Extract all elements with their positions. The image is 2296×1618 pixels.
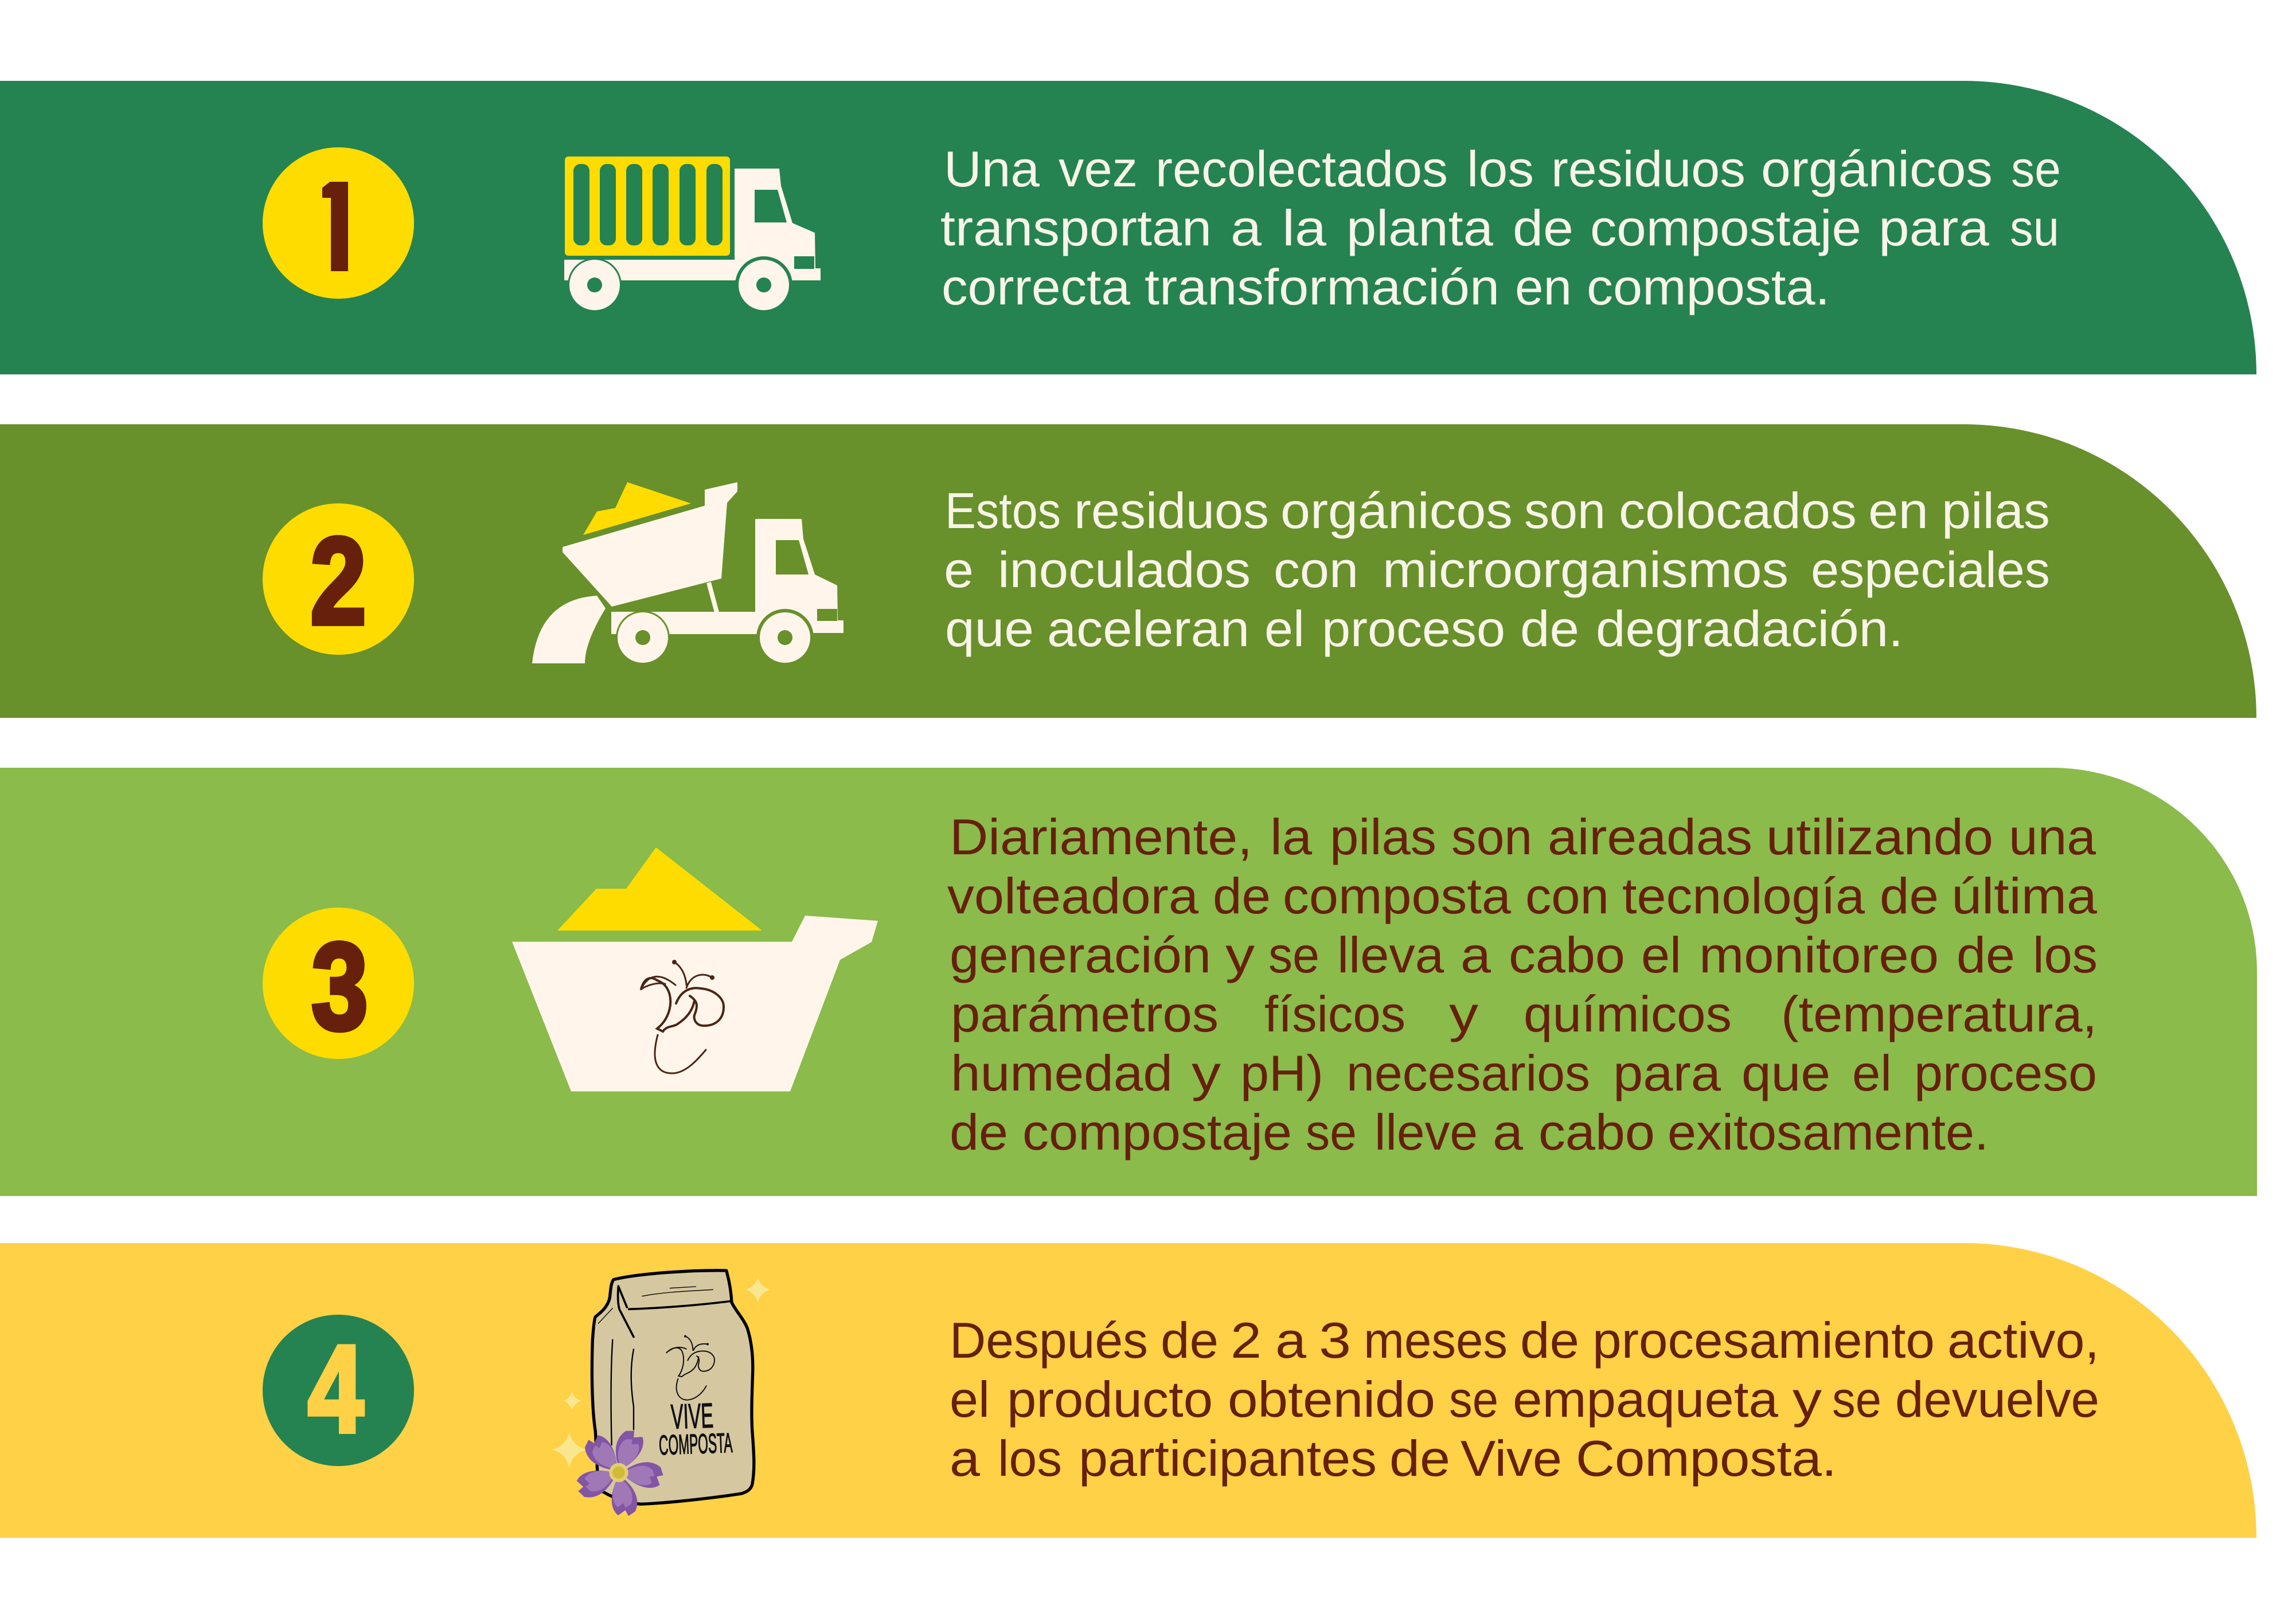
text block 2: colocados — [1619, 482, 1857, 539]
text block 1: se — [2011, 140, 2061, 197]
icon: sprout logo — [641, 961, 724, 1073]
text block 3: y — [1449, 986, 1478, 1042]
number badge 1 — [263, 147, 414, 299]
text block 2: proceso — [1322, 600, 1505, 657]
flower — [572, 1427, 663, 1520]
text block 2: especiales — [1811, 541, 2050, 598]
text block 2: inoculados — [998, 541, 1251, 598]
text block 3: la — [1270, 808, 1312, 865]
text block 3: proceso — [1914, 1045, 2097, 1101]
text block 4: y — [1793, 1371, 1822, 1428]
text block 3: aireadas — [1548, 808, 1752, 865]
text block 3: para — [1613, 1045, 1721, 1101]
text block 4: empaqueta — [1513, 1371, 1778, 1428]
text block 4: Después — [950, 1312, 1148, 1369]
text block 1: compostaje — [1590, 200, 1861, 256]
text block 1: correcta — [942, 259, 1130, 315]
text block 1: de — [1513, 200, 1573, 256]
text block 3: cabo — [1539, 1104, 1655, 1160]
icon: container truck — [564, 157, 821, 314]
text block 2: pilas — [1942, 482, 2050, 539]
text block 2: orgánicos — [1280, 482, 1513, 539]
text block 4: participantes — [1079, 1430, 1377, 1487]
text block 2: degradación. — [1596, 600, 1903, 657]
text block 3: de — [1957, 927, 2015, 983]
text block 1: Una — [944, 140, 1040, 197]
text block 3: pilas — [1330, 808, 1436, 865]
text block 2: residuos — [1074, 482, 1269, 539]
text block 3: con — [1525, 867, 1609, 924]
text block 1: residuos — [1551, 140, 1746, 197]
text block 4: activo, — [1947, 1312, 2099, 1369]
text block 2: que — [945, 600, 1034, 657]
text block 3: tecnología — [1622, 867, 1865, 924]
band 1 — [0, 81, 2256, 374]
number badge 3 — [263, 908, 414, 1059]
text block 3: el — [1641, 927, 1681, 983]
text block 2: microorganismos — [1383, 541, 1789, 598]
text block 3: exitosamente. — [1668, 1104, 1989, 1160]
number badge 2: 2 — [310, 511, 366, 650]
text block 4: los — [998, 1430, 1062, 1487]
text block 4: se — [1449, 1371, 1498, 1428]
text block 1 — [940, 140, 2061, 315]
text block 4: meses — [1364, 1312, 1508, 1369]
panel: step 3 — [0, 768, 2257, 1196]
text block 1: transportan — [940, 200, 1212, 256]
text block 1: vez — [1059, 140, 1138, 197]
text block 3: de — [1880, 867, 1939, 924]
sparkles — [552, 1277, 770, 1467]
text block 4: el — [950, 1371, 990, 1428]
text block 4: a — [1275, 1312, 1306, 1369]
text block 3: humedad — [951, 1045, 1173, 1101]
text block 4: 3 — [1319, 1312, 1351, 1369]
text block 3: y — [1225, 927, 1255, 983]
text block 4: Composta. — [1576, 1430, 1837, 1487]
text block 1: recolectados — [1155, 140, 1448, 197]
bag logo — [666, 1336, 714, 1400]
text block 4: 2 — [1231, 1312, 1262, 1369]
text block 2: e — [944, 541, 974, 598]
text block 2: Estos — [945, 482, 1061, 539]
text block 3: de — [950, 1104, 1008, 1160]
text block 3: lleve — [1375, 1104, 1478, 1160]
text block 3: necesarios — [1346, 1045, 1590, 1101]
text block 3: una — [2009, 808, 2096, 865]
panel: step 4 — [0, 1243, 2256, 1538]
text block 4: producto — [1007, 1371, 1213, 1428]
text block 1: los — [1467, 140, 1534, 197]
text block 2: con — [1274, 541, 1358, 598]
text block 3: pH) — [1240, 1045, 1323, 1101]
text block 4: se — [1832, 1371, 1881, 1428]
text block 4: devuelve — [1895, 1371, 2099, 1428]
text block 3: que — [1741, 1045, 1830, 1101]
text block 1: la — [1282, 200, 1326, 256]
number badge 4: 4 — [308, 1319, 364, 1458]
text block 2 — [944, 482, 2050, 657]
text block 2: en — [1868, 482, 1928, 539]
text block 3: generación — [950, 927, 1211, 983]
panel: step 2 — [0, 424, 2256, 718]
text block 4: procesamiento — [1592, 1312, 1935, 1369]
text block 3: última — [1951, 867, 2097, 924]
text block 1: transformación — [1145, 259, 1500, 315]
band 3 — [0, 768, 2257, 1196]
text block 1: en — [1515, 259, 1572, 315]
number badge 3: 3 — [311, 917, 368, 1056]
text block 1: para — [1879, 200, 1989, 256]
text block 1: orgánicos — [1761, 140, 1993, 197]
text block 3: volteadora — [947, 867, 1198, 924]
text block 3: se — [1306, 1104, 1357, 1160]
text block 3: lleva — [1337, 927, 1444, 983]
text block 3: se — [1268, 927, 1319, 983]
text block 3: monitoreo — [1699, 927, 1939, 983]
text block 4: de — [1389, 1430, 1450, 1487]
text block 3: composta — [1283, 867, 1511, 924]
text block 3: compostaje — [1022, 1104, 1292, 1160]
text block 3: (temperatura, — [1781, 986, 2097, 1042]
text block 4: de — [1161, 1312, 1219, 1369]
icon: compost bin with pile — [512, 847, 878, 1092]
text block 3: a — [1493, 1104, 1523, 1160]
text block 3: a — [1461, 927, 1491, 983]
text block 3: físicos — [1264, 986, 1405, 1042]
text block 3: son — [1451, 808, 1532, 865]
icon: compost bag with flower: COMPOSTA — [658, 1428, 733, 1461]
text block 3 — [947, 808, 2098, 1160]
text block 1: a — [1231, 200, 1262, 256]
bag label — [658, 1396, 733, 1461]
text block 3: parámetros — [951, 986, 1219, 1042]
text block 1: su — [2010, 200, 2059, 256]
number badge 2 — [263, 503, 414, 655]
text block 3: Diariamente, — [950, 808, 1252, 865]
number badge 4 — [263, 1315, 414, 1466]
panel: step 1 — [0, 81, 2256, 374]
text block 1: planta — [1346, 200, 1493, 256]
bag body — [592, 1271, 754, 1504]
text block 4: Vive — [1461, 1430, 1562, 1487]
bag folds — [598, 1286, 731, 1445]
text block 3: químicos — [1524, 986, 1732, 1042]
text block 4: de — [1520, 1312, 1579, 1369]
text block 4 — [950, 1312, 2099, 1487]
bag label: VIVE — [670, 1396, 714, 1436]
text block 2: aceleran — [1047, 600, 1249, 657]
text block 2: el — [1264, 600, 1305, 657]
band 2 — [0, 424, 2256, 718]
icon: compost bag with flower — [552, 1271, 770, 1520]
number badge 1: 1 — [310, 157, 367, 295]
text block 3: y — [1192, 1045, 1221, 1101]
text block 2: son — [1524, 482, 1606, 539]
text block 2: de — [1520, 600, 1579, 657]
text block 3: los — [2033, 927, 2098, 983]
text block 1: composta. — [1587, 259, 1830, 315]
text block 3: utilizando — [1766, 808, 1993, 865]
band 4 — [0, 1243, 2256, 1538]
icon: dump truck — [532, 482, 844, 666]
text block 3: el — [1852, 1045, 1892, 1101]
text block 3: cabo — [1509, 927, 1625, 983]
text block 3: de — [1213, 867, 1271, 924]
text block 4: obtenido — [1228, 1371, 1435, 1428]
text block 4: a — [950, 1430, 980, 1487]
